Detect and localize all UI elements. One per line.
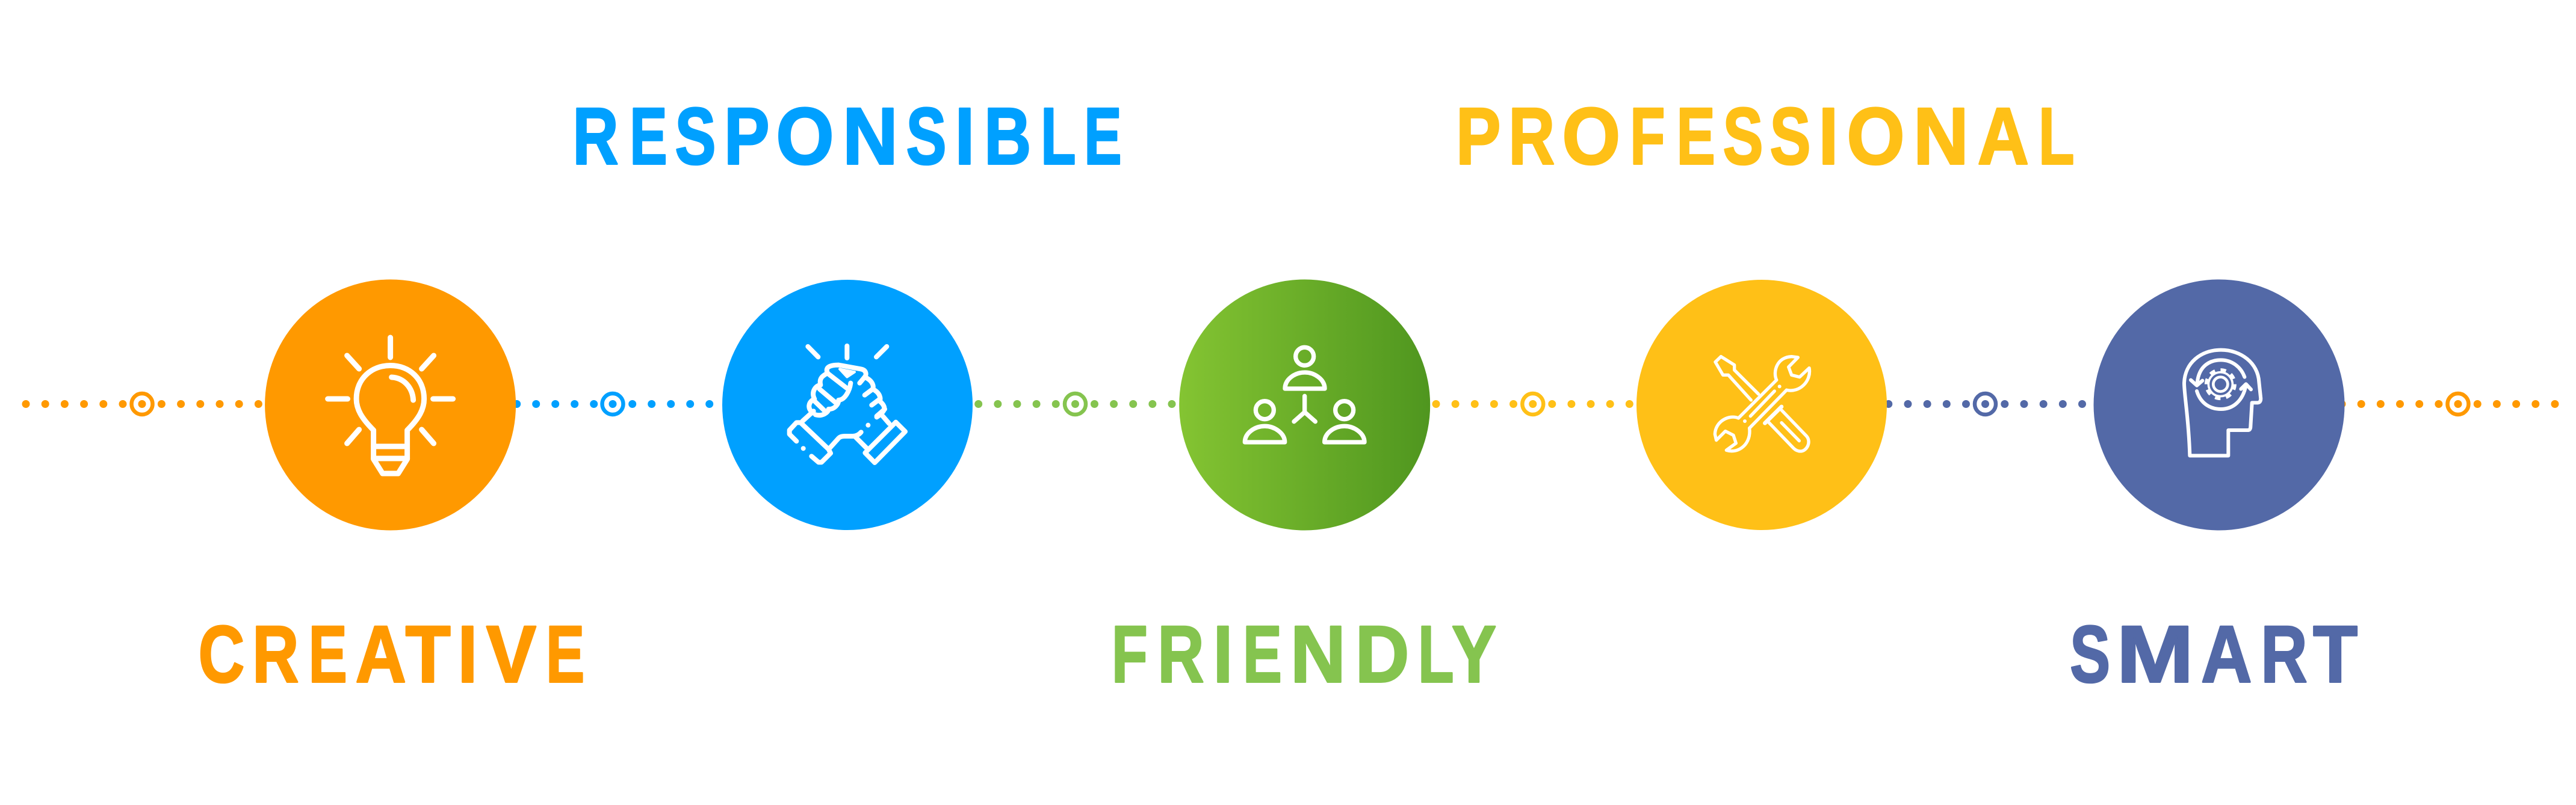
- heading: responsible: E: [630, 91, 667, 182]
- heading: smart: T: [2313, 610, 2358, 699]
- timeline dots: navy: [1889, 393, 2085, 415]
- icon: head with gear: [2184, 350, 2261, 455]
- icon: clasped hands: [790, 346, 905, 463]
- heading: creative: E: [546, 610, 584, 699]
- heading: professional: L: [2039, 91, 2075, 182]
- heading: responsible: L: [1041, 91, 1076, 182]
- icon: wrench and screwdriver: [1715, 357, 1810, 451]
- heading: creative: V: [486, 610, 536, 699]
- panel: responsible: [572, 91, 1122, 530]
- creative circle: [265, 279, 516, 531]
- timeline dots: blue: [517, 393, 713, 415]
- panel: professional: [1456, 91, 2075, 530]
- timeline dots: orange right: [2342, 393, 2558, 415]
- heading: smart: R: [2261, 610, 2308, 699]
- heading: friendly: D: [1355, 610, 1409, 699]
- heading: creative: A: [355, 610, 406, 699]
- heading: responsible: S: [906, 91, 946, 182]
- heading: responsible: N: [843, 91, 898, 182]
- heading: professional: E: [1677, 91, 1715, 182]
- heading: responsible: S: [675, 91, 716, 182]
- heading: friendly: R: [1157, 610, 1204, 699]
- icon: light bulb: [328, 338, 453, 473]
- timeline dots: yellow: [1436, 393, 1632, 415]
- heading: responsible: R: [572, 91, 619, 182]
- heading: smart: M: [2117, 610, 2194, 699]
- heading: smart: A: [2201, 610, 2252, 699]
- heading: responsible: B: [984, 91, 1031, 182]
- responsible circle: [722, 280, 973, 530]
- heading: professional: P: [1456, 91, 1501, 182]
- heading: friendly: Y: [1452, 610, 1496, 699]
- heading: smart: S: [2070, 610, 2110, 699]
- professional circle: [1636, 280, 1887, 530]
- smart circle: [2093, 279, 2345, 531]
- heading: creative: R: [252, 610, 299, 699]
- heading: responsible: I: [955, 91, 974, 182]
- heading: responsible: E: [1084, 91, 1122, 182]
- heading: professional: S: [1769, 91, 1810, 182]
- heading: friendly: N: [1290, 610, 1346, 699]
- heading: professional: O: [1847, 91, 1905, 182]
- timeline dots: green: [979, 393, 1177, 415]
- heading: responsible: O: [776, 91, 834, 182]
- heading: professional: S: [1723, 91, 1763, 182]
- heading: professional: I: [1819, 91, 1838, 182]
- heading: responsible: P: [724, 91, 770, 182]
- heading: friendly: E: [1243, 610, 1282, 699]
- heading: professional: R: [1508, 91, 1555, 182]
- panel: creative: [199, 279, 584, 699]
- heading: professional: O: [1562, 91, 1620, 182]
- timeline dots: orange left: [26, 393, 262, 415]
- heading: creative: I: [458, 610, 477, 699]
- heading: creative: E: [309, 610, 347, 699]
- panel: smart: [2070, 279, 2358, 699]
- heading: professional: A: [1978, 91, 2029, 182]
- heading: friendly: I: [1213, 610, 1233, 699]
- heading: creative: C: [199, 610, 244, 699]
- heading: friendly: F: [1112, 610, 1148, 699]
- heading: professional: F: [1630, 91, 1665, 182]
- panel: friendly: [1112, 279, 1496, 699]
- friendly circle: [1179, 279, 1430, 531]
- heading: friendly: L: [1418, 610, 1454, 699]
- icon: people network: [1245, 347, 1364, 442]
- heading: professional: N: [1913, 91, 1969, 182]
- heading: creative: T: [406, 610, 451, 699]
